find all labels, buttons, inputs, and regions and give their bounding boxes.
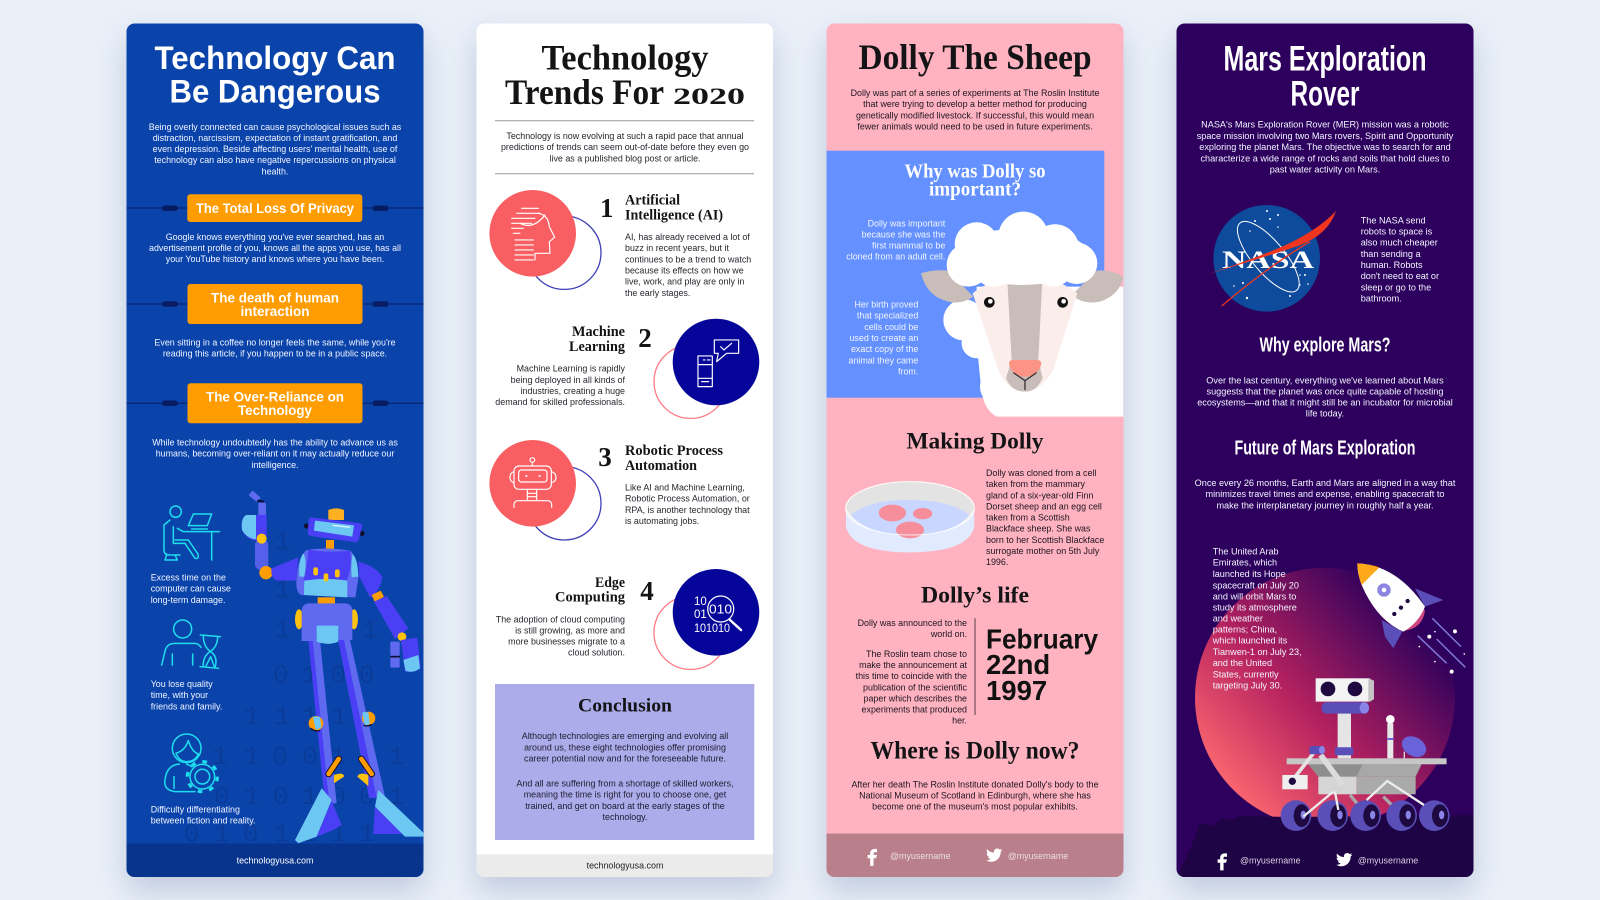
text: robots cheaper: bathroom. [1361, 293, 1402, 303]
binary digits backdrop: 1 [389, 782, 404, 812]
text: reliance: humans, becoming over-reliant on it may actually reduce our [156, 449, 394, 459]
icon: binary magnifier: 10 [694, 596, 707, 608]
description: is still growing, as more and [515, 626, 625, 636]
title: Trends For [505, 72, 664, 112]
text: Hope, Tianwen, US: and weather [1213, 614, 1263, 624]
heading badge: The Total Loss Of Privacy [187, 194, 362, 222]
text: robots cheaper: don't need to eat or [1361, 271, 1439, 281]
text: robots cheaper: robots to space is [1361, 227, 1433, 237]
robot illustration [242, 491, 423, 843]
text: Hope, Tianwen, US: Emirates, which [1213, 558, 1277, 568]
description: RPA, is another technology that [625, 505, 750, 515]
binary digits backdrop: 0 [214, 782, 229, 812]
text: robots cheaper: also much cheaper [1361, 238, 1438, 248]
binary digits backdrop: 0 [243, 820, 258, 850]
text: robots cheaper: human. Robots [1361, 260, 1423, 270]
binary digits backdrop: 1 [244, 702, 259, 732]
footer bar: technologyusa.com [237, 855, 313, 865]
connector: reliance [126, 400, 424, 406]
text: fiction and reality: Difficulty differentiating [151, 804, 240, 814]
text: every 26 months: Once every 26 months, Earth and Mars are aligned in a way that [1195, 478, 1456, 488]
text: birth proved: that specialized [857, 311, 918, 321]
text: museum: After her death The Roslin Institute donated Dolly's body to the [851, 779, 1099, 789]
binary digits backdrop: 1 [331, 820, 346, 850]
intro rule top [495, 120, 754, 122]
binary digits backdrop: 1 [362, 616, 378, 646]
binary digits backdrop: 1 [244, 782, 259, 812]
description: demand for skilled professionals. [495, 397, 625, 407]
icon: server and chat [698, 340, 739, 387]
text: first mammal cloned: first mammal to be [872, 241, 945, 251]
heading: Why explore Mars: Why explore Mars? [1260, 334, 1390, 356]
text: announcement: world on. [930, 629, 967, 639]
binary digits backdrop: 1 [331, 742, 346, 772]
conclusion box: career potential now and for the foreseeable future. [524, 753, 726, 763]
description: more businesses migrate to a [508, 637, 625, 647]
intro text: health. [262, 166, 288, 176]
text: birth proved: cells could be [864, 322, 918, 332]
description: Machine Learning is rapidly [517, 364, 626, 374]
text: museum: become one of the museum's most popular exhibits. [872, 802, 1078, 812]
heading: Dolly's life: Dolly’s life [921, 582, 1029, 608]
text: Hope, Tianwen, US: targeting July 30. [1213, 680, 1282, 690]
ground [1176, 815, 1474, 877]
conclusion box [495, 684, 754, 840]
icon: person with hourglass [162, 620, 220, 668]
description: cloud solution. [568, 648, 625, 658]
binary digits backdrop: 1 [302, 782, 318, 812]
intro text: past water activity on Mars. [1270, 164, 1380, 174]
panel: Mars Exploration Rover [1176, 24, 1474, 877]
intro text: that were trying to develop a better method for producing [863, 99, 1087, 109]
rover illustration [1281, 678, 1450, 831]
handle: @myusername [1240, 855, 1301, 865]
description: being deployed in all kinds of [511, 375, 626, 385]
heading badge: The Over-Reliance on Technology [188, 383, 362, 423]
NASA logo [1207, 205, 1336, 312]
intro text: genetically modified livestock. If successful, this would mean [856, 110, 1094, 120]
text: announcement: publication of the scientific [863, 682, 968, 692]
panel: Technology Can Be Dangerous [126, 24, 424, 878]
text: Hope, Tianwen, US: spacecraft on July 20 [1213, 580, 1299, 590]
text: announcement: make the announcement at [859, 660, 968, 670]
binary digits backdrop: 0 [273, 782, 288, 812]
intro text: Being overly connected can cause psychological issues such as [149, 122, 402, 132]
binary digits backdrop [184, 527, 404, 850]
description: The adoption of cloud computing [496, 614, 625, 624]
text: why explore: ecosystems—and that it might still be an incubator for microbial [1197, 398, 1453, 408]
intro text: distraction, narcissism, expectation of instant gratification, and [153, 133, 397, 143]
text: Hope, Tianwen, US: and will orbit Mars to [1213, 591, 1296, 601]
heading badge: The Total Loss Of Privacy: The Total Loss Of Privacy [196, 201, 354, 216]
text: robots cheaper: The NASA send [1361, 215, 1426, 225]
icon: twitter [1336, 853, 1352, 866]
heading badge: The death of human interaction [188, 284, 362, 324]
footer bar [126, 844, 424, 878]
binary digits backdrop: 0 [272, 742, 288, 772]
text: Hope, Tianwen, US: Tianwen-1 on July 23, [1213, 647, 1302, 657]
heading: Artificial [625, 192, 680, 208]
text: cloning: surrogate mother on 5th July [986, 546, 1100, 556]
handle: @myusername [1358, 855, 1418, 865]
binary digits backdrop: 1 [275, 616, 290, 646]
heading: Machine [572, 324, 625, 340]
text: interaction: Even sitting in a coffee no longer feels the same, while you're [154, 338, 396, 348]
binary digits backdrop: 1 [244, 742, 259, 772]
binary digits backdrop: 1 [302, 820, 318, 850]
heading: why was Dolly so important: Why was Dolly so [904, 162, 1046, 182]
handle: @myusername [890, 851, 951, 861]
text: announcement: paper which describes the [864, 694, 967, 704]
heading: Automation [625, 458, 698, 474]
text: fiction and reality: between fiction and reality. [151, 816, 255, 826]
text: birth proved: from. [898, 367, 918, 377]
title: Technology Can [154, 40, 396, 76]
intro text: exploring the planet Mars. The objective was to search for and [1199, 142, 1451, 152]
binary digits backdrop: 1 [275, 702, 290, 732]
binary digits backdrop: 1 [212, 742, 228, 772]
binary digits backdrop: 0 [359, 660, 374, 690]
binary digits backdrop: 1 [275, 575, 290, 605]
text: first mammal cloned: cloned from an adult cell. [846, 252, 945, 262]
text: interaction: reading this article, if you happen to be in a public space. [163, 349, 387, 359]
text: why explore: life today. [1306, 409, 1344, 419]
text: quality time: time, with your [151, 690, 208, 700]
text: excess time: Excess time on the [151, 572, 226, 582]
intro text: live as a published blog post or article. [550, 153, 700, 163]
sheep illustration [921, 212, 1123, 417]
heading: Where is Dolly now: Where is Dolly now? [870, 736, 1080, 764]
text: privacy: Google knows everything you've ever searched, has an [166, 232, 384, 242]
text: birth proved: exact copy of the [851, 344, 918, 354]
footer bar [826, 834, 1124, 878]
panel: Dolly The Sheep [826, 24, 1124, 878]
text: cloning: born to her Scottish Blackface [986, 535, 1104, 545]
text: birth proved: animal they came [848, 355, 918, 365]
description: is automating jobs. [625, 516, 699, 526]
icon: twitter [986, 849, 1002, 862]
title: 2020 [673, 84, 745, 109]
text: cloning: Dorset sheep and an egg cell [986, 501, 1102, 511]
text: excess time: long-term damage. [151, 595, 225, 605]
text: every 26 months: minimizes travel times and expense, enabling spacecraft to [1206, 489, 1444, 499]
icon: binary magnifier: 01 [694, 609, 707, 621]
heading: Learning [569, 339, 625, 355]
binary digits backdrop: 1 [389, 742, 404, 772]
binary digits backdrop: 1 [332, 702, 347, 732]
intro text: predictions of trends can seem out-of-date before they even go [501, 142, 749, 152]
panel: Technology Trends For 2020 [476, 24, 774, 877]
description: industries, creating a huge [521, 386, 625, 396]
text: Hope, Tianwen, US: study its atmosphere [1213, 602, 1297, 612]
text: cloning: gland of a six-year-old Finn [986, 490, 1093, 500]
NASA logo: NASA [1222, 247, 1314, 274]
intro text: space mission involving two Mars rovers, Spirit and Opportunity [1197, 131, 1454, 141]
heading badge: The Over-Reliance on Technology: The Over-Reliance on [206, 390, 344, 404]
heading: why was Dolly so important: important? [929, 180, 1021, 200]
text: cloning: 1996. [986, 557, 1008, 567]
text: cloning: taken from a Scottish [986, 513, 1070, 523]
item 1: Artificial Intelligence [489, 190, 751, 298]
conclusion box: around us, these eight technologies offer promising [524, 742, 726, 752]
icon: AI head [512, 208, 555, 260]
text: reliance: While technology undoubtedly has the ability to advance us as [152, 438, 398, 448]
number 4: 4 [640, 576, 654, 606]
icon: person at computer [164, 506, 219, 560]
text: announcement: this time to coincide with the [856, 671, 967, 681]
number 3: 3 [598, 442, 612, 472]
text: quality time: You lose quality [151, 679, 213, 689]
intro text: even depression. Beside affecting users' mental health, use of [153, 144, 398, 154]
icon: robot [510, 458, 556, 507]
conclusion box: And all are suffering from a shortage of skilled workers, [516, 779, 734, 789]
binary digits backdrop: 0 [273, 660, 288, 690]
intro text: NASA's Mars Exploration Rover (MER) mission was a robotic [1201, 120, 1449, 130]
conclusion box: technology. [603, 812, 647, 822]
binary digits backdrop: 0 [359, 782, 374, 812]
icon: woman with gear [165, 734, 217, 792]
conclusion box: Although technologies are emerging and evolving all [522, 731, 728, 741]
text: cloning: Blackface sheep. She was [986, 524, 1091, 534]
text: announcement: Dolly was announced to the [858, 618, 967, 628]
text: cloning: Dolly was cloned from a cell [986, 468, 1096, 478]
binary digits backdrop: 1 [214, 820, 229, 850]
text: privacy: your YouTube history and knows where you have been. [166, 254, 384, 264]
footer bar: technologyusa.com [587, 860, 663, 870]
text: announcement: her. [952, 716, 967, 726]
intro rule bottom [495, 173, 754, 175]
conclusion box: Conclusion [578, 696, 672, 716]
heading: Future of Mars Exploration: Future of Mars Exploration [1234, 438, 1416, 460]
date: February 22nd 1997: 22nd [986, 649, 1050, 680]
binary digits backdrop: 1 [302, 660, 318, 690]
item 3: Robotic Process Automation [489, 440, 750, 540]
text: first mammal cloned: Dolly was important [868, 218, 946, 228]
item 4: Edge Computing [496, 569, 759, 669]
heading badge: The Over-Reliance on Technology: Technology [238, 403, 312, 418]
date: February 22nd 1997: February [986, 623, 1099, 654]
description: continues to be a trend to watch [625, 254, 751, 264]
binary digits backdrop: 1 [359, 820, 374, 850]
heading: Edge [595, 575, 625, 591]
icon: facebook [868, 849, 877, 866]
binary digits backdrop: 0 [331, 782, 346, 812]
text: birth proved: Her birth proved [854, 300, 918, 310]
text: Hope, Tianwen, US: The United Arab [1213, 547, 1279, 557]
item 2: Machine Learning [495, 319, 759, 418]
handle: @myusername [1008, 851, 1068, 861]
text: Hope, Tianwen, US: States, currently [1213, 669, 1279, 679]
text: reliance: intelligence. [251, 460, 299, 470]
description: because its effects on how we [625, 266, 744, 276]
binary digits backdrop: 1 [274, 820, 289, 850]
heading badge: The death of human interaction: The death of human [211, 290, 339, 305]
text: museum: National Museum of Scotland in Edinburgh, where she has [859, 790, 1091, 800]
date: February 22nd 1997: 1997 [986, 675, 1047, 706]
heading: Robotic Process [625, 443, 723, 459]
footer bar [476, 854, 774, 877]
description: buzz in recent years, but it [625, 243, 729, 253]
intro text: characterize a wide range of rocks and soils that hold clues to [1200, 153, 1450, 163]
text: first mammal cloned: because she was the [862, 229, 945, 239]
blue panel: why important [826, 151, 1104, 398]
text: announcement: experiments that produced [862, 705, 967, 715]
title: Be Dangerous [170, 74, 380, 110]
text: Hope, Tianwen, US: patterns; China, [1213, 625, 1277, 635]
rocket illustration [1357, 563, 1465, 674]
conclusion box: meaning the time is right for you to choose one, get [524, 790, 727, 800]
text: announcement: The Roslin team chose to [866, 649, 967, 659]
text: Hope, Tianwen, US: and the United [1213, 658, 1272, 668]
illustration: petri dish [846, 482, 974, 552]
heading: Making Dolly: Making Dolly [906, 428, 1044, 454]
number 1: 1 [600, 193, 613, 223]
text: excess time: computer can cause [151, 584, 231, 594]
description: the early stages. [625, 288, 690, 298]
text: robots cheaper: sleep or go to the [1361, 282, 1431, 292]
text: every 26 months: make the interplanetary journey in roughly half a year. [1216, 500, 1434, 510]
intro text: fewer animals would need to be used in future experiments. [857, 121, 1093, 131]
divider line [974, 618, 976, 715]
connector: interaction [126, 301, 424, 307]
icon: facebook [1218, 853, 1227, 870]
text: cloning: taken from the mammary [986, 479, 1086, 489]
description: live, work, and play are only in [625, 277, 744, 287]
heading: Intelligence (AI) [625, 208, 723, 224]
text: birth proved: used to create an [849, 333, 918, 343]
text: Hope, Tianwen, US: which launched its [1212, 636, 1288, 646]
binary digits backdrop: 0 [331, 660, 346, 690]
title [505, 38, 745, 112]
text: why explore: suggests that the planet was once quite capable of hosting [1207, 386, 1443, 396]
text: robots cheaper: than sending a [1361, 249, 1421, 259]
title: Dolly The Sheep [858, 37, 1092, 77]
icon: binary magnifier [694, 596, 741, 635]
binary digits backdrop: 1 [302, 702, 318, 732]
heading badge: The death of human interaction: interaction [240, 304, 310, 319]
text: Hope, Tianwen, US: launched its Hope [1213, 569, 1286, 579]
text: quality time: friends and family. [151, 701, 222, 711]
conclusion box: trained, and get on board at the early stages of the [525, 801, 725, 811]
icon: binary magnifier: 010 [709, 602, 732, 616]
intro text: Technology is now evolving at such a rapid pace that annual [506, 131, 744, 141]
icon: binary magnifier: 101010 [694, 623, 730, 635]
number 2: 2 [638, 323, 652, 353]
text: privacy: advertisement profile of you, knows all the apps you use, has all [149, 243, 401, 253]
description: AI, has already received a lot of [625, 232, 750, 242]
title: Technology [542, 38, 708, 78]
title: Rover [1290, 74, 1360, 114]
heading: Computing [555, 590, 625, 606]
description: Robotic Process Automation, or [625, 494, 750, 504]
binary digits backdrop: 0 [184, 820, 199, 850]
binary digits backdrop: 1 [275, 527, 290, 557]
title: Mars Exploration [1224, 40, 1426, 78]
binary digits backdrop: 0 [302, 742, 318, 772]
description: Like AI and Machine Learning, [625, 482, 745, 492]
intro text: Dolly was part of a series of experiments at The Roslin Institute [851, 88, 1099, 98]
connector: privacy [126, 206, 424, 211]
planet Mars [1195, 568, 1455, 828]
intro text: technology can also have negative repercussions on physical [154, 155, 396, 165]
text: why explore: Over the last century, everything we've learned about Mars [1206, 375, 1444, 385]
